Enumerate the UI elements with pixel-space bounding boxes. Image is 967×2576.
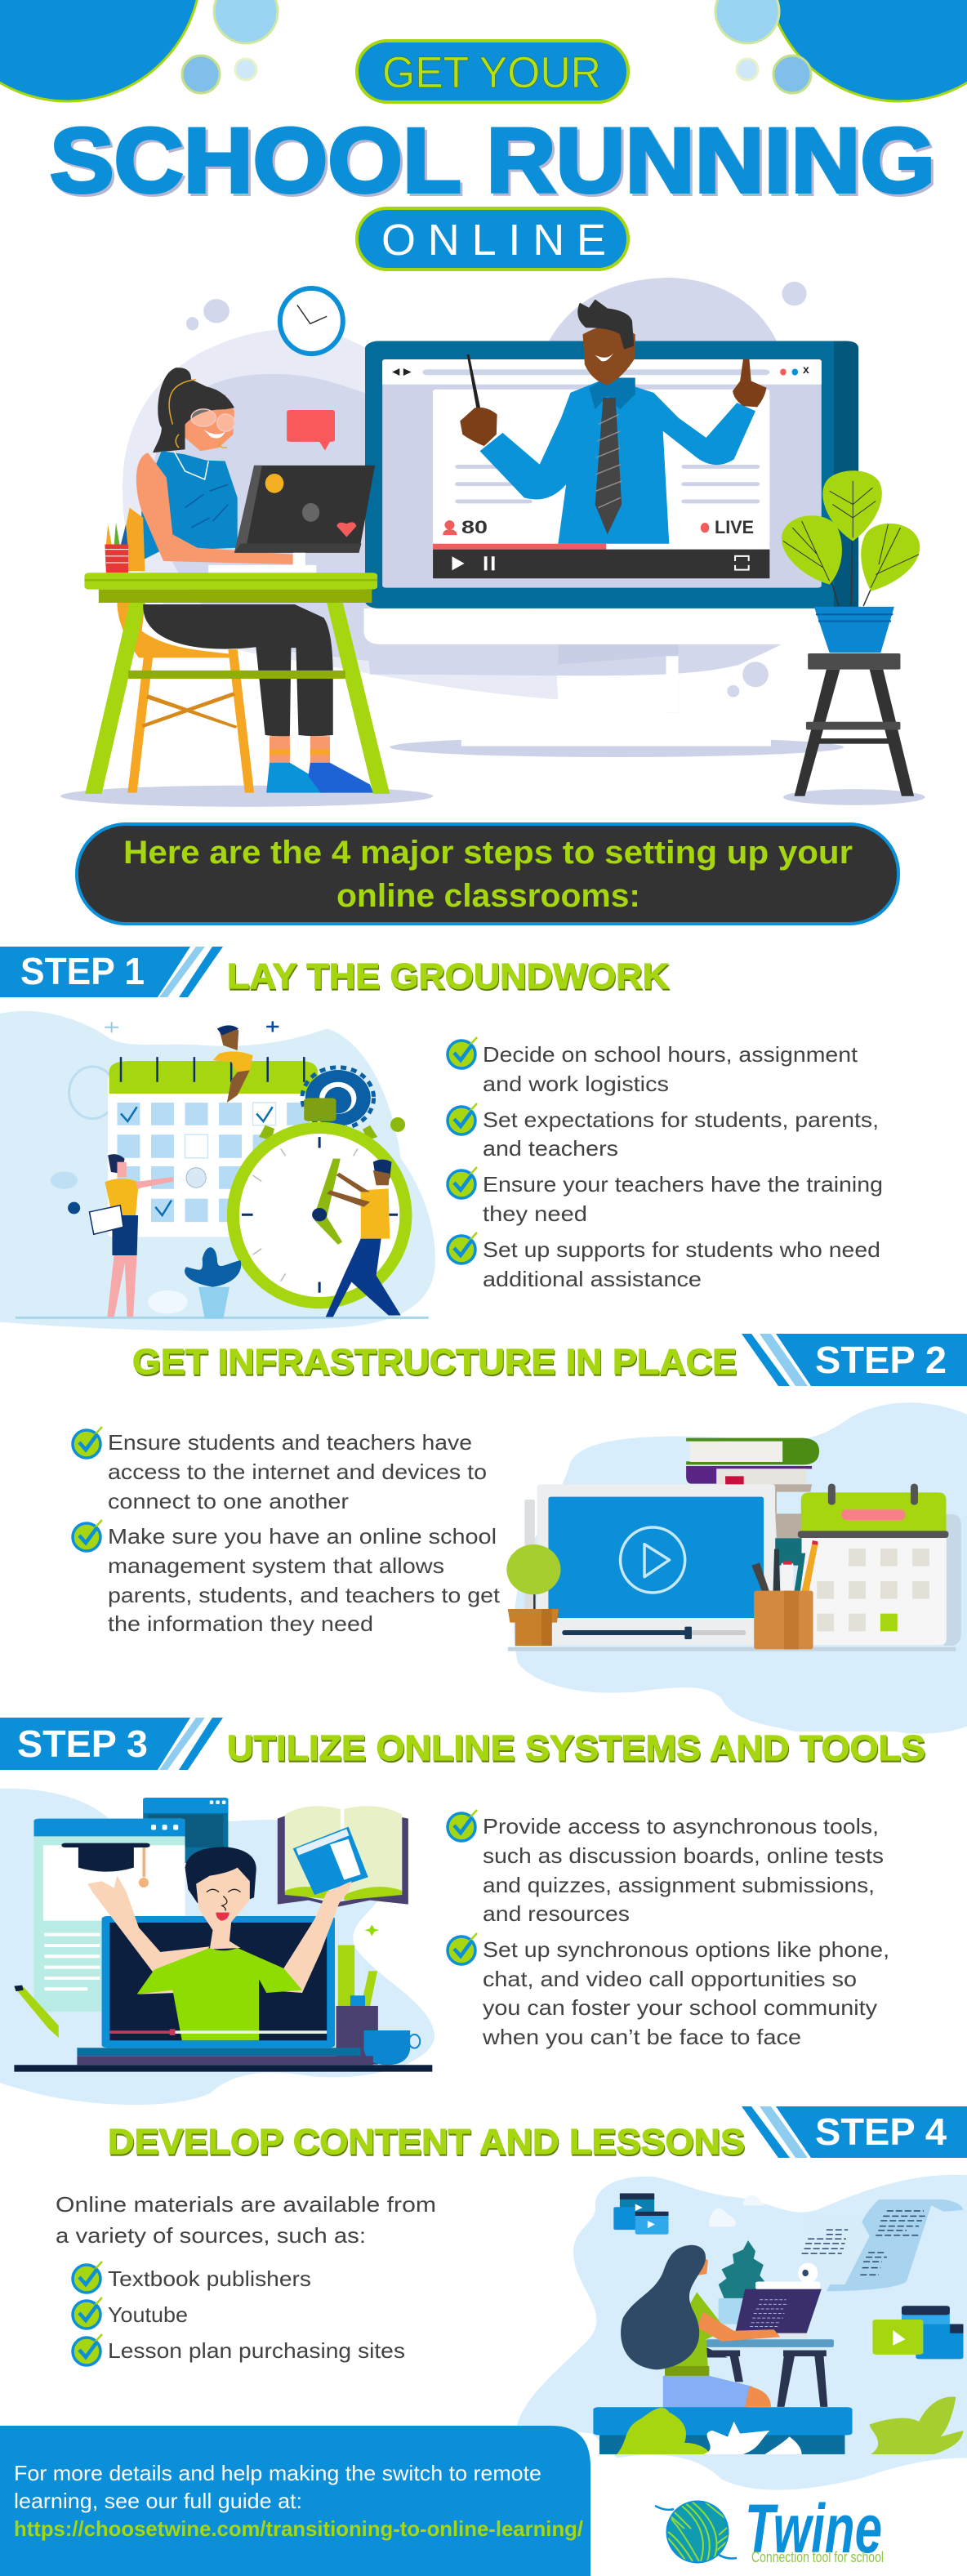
pill: get your: GET YOUR	[382, 48, 601, 97]
student legs and shoes	[128, 604, 373, 793]
right video cards	[872, 2306, 963, 2359]
footer panel: For more details and help making the switch to remote	[14, 2461, 541, 2485]
step 4 heading: DEVELOP CONTENT AND LESSONS	[108, 2122, 745, 2162]
step 3 checklist: and resources	[483, 1901, 630, 1926]
illustration: video, books, calendar	[506, 1402, 967, 1734]
panel: step 1	[0, 947, 883, 1331]
back browser window	[143, 1798, 228, 1863]
calendar	[798, 1484, 961, 1646]
step 1 band: STEP 1	[20, 950, 145, 992]
step 2 heading: GET INFRASTRUCTURE IN PLACE	[132, 1342, 737, 1382]
step 3 checklist: Set up synchronous options like phone,	[483, 1937, 889, 1962]
monitor	[364, 341, 858, 747]
plant and webcam	[719, 2240, 820, 2324]
panel: step 2	[73, 1334, 967, 1734]
student figure	[87, 1847, 351, 2040]
step 1 checklist: and teachers	[483, 1136, 618, 1161]
decorative header bubbles	[0, 0, 967, 101]
step 4 band: STEP 4	[815, 2110, 947, 2153]
wordmark: Twine	[745, 2490, 882, 2567]
step 4 checklist: Lesson plan purchasing sites	[108, 2338, 405, 2363]
step 1 checklist: Decide on school hours, assignment	[483, 1042, 858, 1067]
tablet	[508, 1484, 956, 1651]
stool	[795, 653, 914, 796]
video cards	[613, 2193, 669, 2235]
worker on top of calendar	[213, 1025, 253, 1103]
footer panel: https://choosetwine.com/transitioning-to-online-learning/	[14, 2516, 583, 2541]
front browser window	[34, 1800, 225, 2012]
teacher figure	[460, 300, 767, 544]
tagline: Connection tool for school	[751, 2549, 884, 2565]
step 4 intro text	[56, 2192, 436, 2248]
step 3 band: STEP 3	[17, 1723, 148, 1765]
bench and plants	[593, 2396, 963, 2454]
step 2 checklist: connect to one another	[108, 1489, 349, 1513]
step 4 band	[742, 2106, 967, 2158]
open book	[278, 1806, 408, 1907]
panel: step 4	[0, 2106, 967, 2576]
worker at calendar	[68, 1154, 174, 1317]
step 2 checklist: Make sure you have an online school	[108, 1524, 497, 1549]
step 3 checklist: and quizzes, assignment submissions,	[483, 1873, 875, 1897]
scroll documents	[802, 2199, 963, 2291]
logo: twine	[654, 2501, 884, 2563]
plant	[185, 1247, 241, 1319]
step 3 heading: UTILIZE ONLINE SYSTEMS AND TOOLS	[227, 1728, 925, 1768]
video labels: x	[803, 363, 809, 376]
desk	[84, 573, 390, 794]
step 4 checklist	[73, 2262, 405, 2365]
step 1 checklist: Set expectations for students, parents,	[483, 1108, 879, 1132]
step 2 checklist: management system that allows	[108, 1553, 444, 1578]
step 1 checklist: Set up supports for students who need	[483, 1237, 880, 1262]
step 2 checklist: the information they need	[108, 1611, 373, 1636]
step 2 band	[742, 1334, 967, 1386]
step 1 checklist: and work logistics	[483, 1072, 669, 1096]
desk items	[14, 1925, 420, 2065]
books	[686, 1438, 819, 1566]
step 2 checklist: access to the internet and devices to	[108, 1460, 487, 1484]
step 4 checklist: Youtube	[108, 2302, 188, 2327]
laptop and desk	[703, 2289, 834, 2407]
step 3 band	[0, 1718, 223, 1770]
step 4 checklist: Textbook publishers	[108, 2266, 311, 2291]
pencil cup	[105, 523, 128, 573]
footer panel: learning, see our full guide at:	[14, 2489, 302, 2513]
step 4 intro text: a variety of sources, such as:	[56, 2223, 366, 2248]
step 3 checklist	[448, 1810, 889, 2049]
potted plant	[506, 1544, 561, 1646]
student figure	[117, 368, 375, 573]
background blob	[514, 1402, 967, 1734]
step 1 checklist: they need	[483, 1201, 587, 1226]
step 1 checklist	[448, 1037, 883, 1291]
step 2 band: STEP 2	[815, 1339, 947, 1381]
panel: step 3	[0, 1718, 925, 2105]
banner: four steps intro	[77, 824, 898, 924]
step 1 heading: LAY THE GROUNDWORK	[227, 956, 669, 996]
speech bubble	[287, 410, 335, 450]
woman figure	[621, 2245, 780, 2408]
title	[50, 41, 935, 270]
footer panel	[0, 2426, 590, 2576]
pill: online: ONLINE	[381, 216, 606, 265]
step 1 checklist: additional assistance	[483, 1267, 702, 1291]
icon: yarn ball	[655, 2501, 737, 2562]
step 4 intro text: Online materials are available from	[56, 2192, 436, 2217]
laptop	[14, 1916, 432, 2072]
step 2 checklist	[73, 1427, 501, 1636]
step 3 checklist: Provide access to asynchronous tools,	[483, 1814, 879, 1838]
step 2 checklist: parents, students, and teachers to get	[108, 1583, 501, 1607]
plant	[782, 470, 920, 653]
pill: online	[357, 208, 628, 270]
gear	[302, 1067, 374, 1129]
pencil cup	[751, 1540, 818, 1649]
video labels	[461, 363, 809, 537]
illustration: student in laptop	[0, 1789, 434, 2105]
calendar	[108, 1057, 318, 1237]
step 2 checklist: Ensure students and teachers have	[108, 1430, 472, 1455]
illustration: woman at laptop	[517, 2175, 967, 2490]
heading: school running: SCHOOL RUNNING	[50, 109, 935, 212]
objects	[506, 1438, 961, 1651]
video labels: 80	[461, 517, 488, 537]
worker at stopwatch	[326, 1160, 401, 1317]
step 3 checklist: chat, and video call opportunities so	[483, 1967, 857, 1991]
step 3 checklist: you can foster your school community	[483, 1995, 877, 2020]
step 3 checklist: such as discussion boards, online tests	[483, 1843, 884, 1868]
illustration: teacher on monitor and student at desk	[60, 278, 925, 807]
pill: get your	[357, 41, 628, 102]
video labels: LIVE	[715, 517, 754, 537]
step 1 band	[0, 947, 223, 997]
chair	[117, 603, 254, 793]
graduation cap	[62, 1843, 149, 1887]
illustration: calendar and stopwatch	[0, 1011, 435, 1331]
background blobs	[60, 278, 925, 807]
stopwatch	[227, 1098, 412, 1308]
banner: four steps intro: Here are the 4 major steps to setting up your	[123, 835, 853, 871]
banner: four steps intro: online classrooms:	[336, 878, 640, 914]
step 3 checklist: when you can’t be face to face	[482, 2025, 801, 2049]
step 1 checklist: Ensure your teachers have the training	[483, 1172, 883, 1197]
icon: wall clock	[280, 288, 343, 354]
